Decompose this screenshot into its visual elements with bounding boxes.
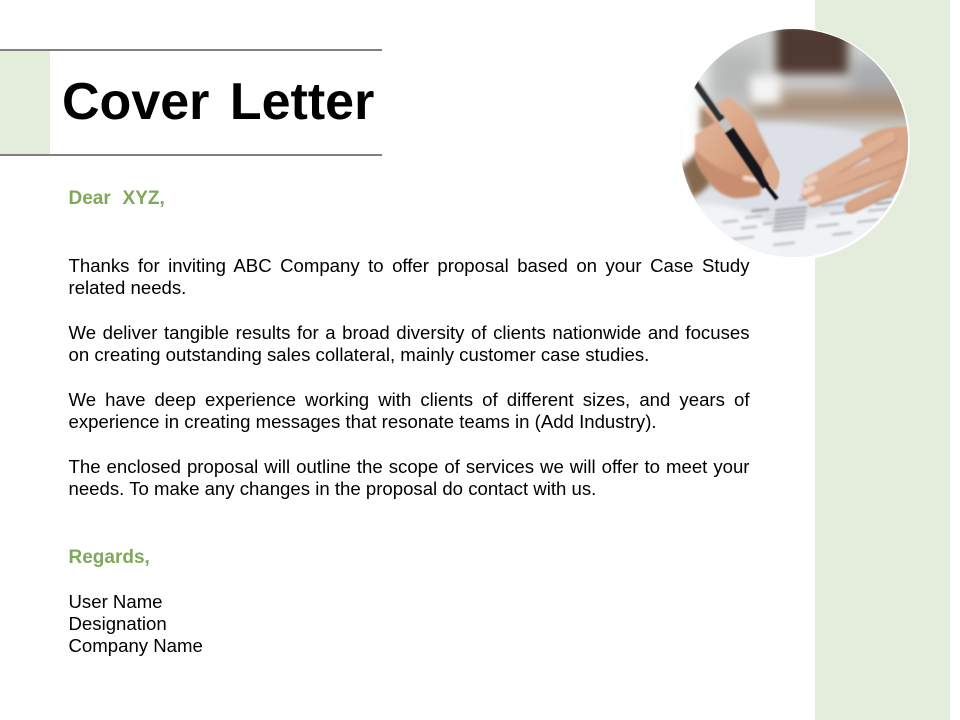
photo: hands writing on a document (680, 29, 910, 258)
icon: left hand (695, 97, 779, 198)
title block (0, 49, 382, 156)
paragraph 3: We have deep experience working with clients of different sizes, and years of (68, 389, 750, 410)
signature block: Company Name (68, 635, 203, 656)
right side panel (815, 0, 950, 720)
paragraph 1 (68, 255, 750, 298)
paragraph 2: We deliver tangible results for a broad diversity of clients nationwide and focuses (68, 322, 750, 343)
paragraph 3 (68, 389, 750, 432)
sign-off: Regards, (68, 546, 150, 568)
paragraph 1: related needs. (68, 277, 186, 298)
paragraph 2 (68, 322, 750, 365)
signature block: Designation (68, 613, 167, 634)
paragraph 4: The enclosed proposal will outline the scope of services we will offer to meet your (68, 456, 750, 477)
paragraph 3: experience in creating messages that resonate teams in (Add Industry). (68, 411, 657, 432)
paragraph 2: on creating outstanding sales collateral, mainly customer case studies. (68, 344, 649, 365)
paragraph 4 (68, 456, 750, 499)
salutation: Dear XYZ, (68, 188, 165, 208)
paragraph 4: needs. To make any changes in the proposal do contact with us. (68, 478, 596, 499)
icon: right hand (803, 126, 920, 207)
signature block: User Name (68, 591, 163, 612)
title accent square (0, 50, 50, 155)
top rule (0, 49, 382, 51)
title: Cover Letter (62, 72, 374, 130)
icon: pen (695, 80, 777, 199)
signature block (68, 591, 203, 656)
bottom rule (0, 154, 382, 156)
paragraph 1: Thanks for inviting ABC Company to offer proposal based on your Case Study (68, 255, 750, 276)
